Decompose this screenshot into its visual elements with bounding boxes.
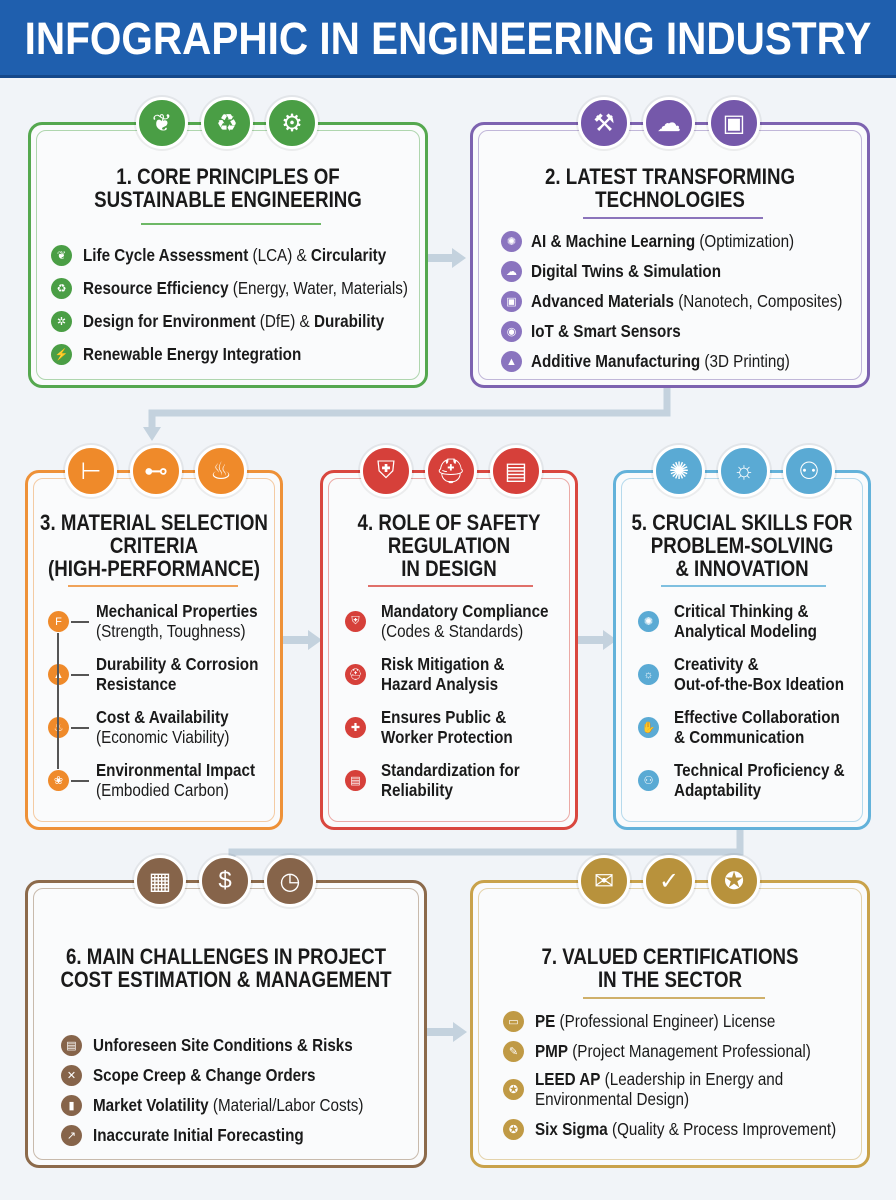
- list 7: Environmental Design): [535, 1089, 689, 1109]
- icon: gear: [266, 97, 318, 149]
- list 7: LEED AP (Leadership in Energy and: [535, 1069, 783, 1089]
- list 4: Risk Mitigation &: [381, 654, 504, 674]
- list 1: Design for Environment (DfE) & Durability: [83, 311, 384, 331]
- icon: leaf: ❦: [152, 110, 172, 136]
- icon: clock: [264, 855, 316, 907]
- icon: shield: [360, 445, 412, 497]
- list 6: Market Volatility (Material/Labor Costs): [93, 1095, 363, 1115]
- list 5: ✋: [642, 722, 655, 734]
- list 1: ⚡: [55, 349, 68, 361]
- connector: panel 2 to panel 3: [143, 388, 670, 441]
- list 3: (Economic Viability): [96, 727, 229, 747]
- heading 7: [542, 944, 798, 992]
- list 3: Mechanical Properties: [96, 601, 258, 621]
- heading 6: [60, 944, 392, 992]
- icon: money bag: [199, 855, 251, 907]
- icon: caliper: [65, 445, 117, 497]
- list 2: ▣: [506, 296, 517, 308]
- icon: caliper: ⊢: [81, 458, 101, 484]
- arrow: panel 6 to panel 7: [427, 1022, 467, 1042]
- icon: robot arm: ⚒: [593, 110, 615, 136]
- list 6: ↗: [67, 1130, 76, 1142]
- list 7: [503, 1011, 836, 1140]
- icon: light bulb: ☼: [733, 457, 755, 484]
- list 1: Life Cycle Assessment (LCA) & Circularity: [83, 245, 386, 265]
- icon: cloud: [643, 97, 695, 149]
- list 5: Technical Proficiency &: [674, 760, 845, 780]
- list 3: (Strength, Toughness): [96, 621, 246, 641]
- panel 2: technologies: [470, 122, 870, 388]
- icon: hard hat: ⛑: [436, 458, 466, 484]
- heading 1: [94, 164, 362, 212]
- list 3: ♨: [54, 722, 63, 734]
- list 7: ✎: [509, 1046, 518, 1058]
- list 2: ✺: [507, 236, 516, 248]
- list 2: ▲: [506, 356, 517, 368]
- panel 3: material selection: [25, 470, 283, 830]
- list 3: Resistance: [96, 674, 176, 694]
- list 5: Effective Collaboration: [674, 707, 840, 727]
- list 3: (Embodied Carbon): [96, 780, 229, 800]
- list 5: Out-of-the-Box Ideation: [674, 674, 844, 694]
- icon: award check: ✓: [659, 868, 679, 894]
- heading 3: 3. MATERIAL SELECTION: [40, 510, 268, 535]
- list 7: PE (Professional Engineer) License: [535, 1011, 775, 1031]
- icon: award check: [643, 855, 695, 907]
- list 2: Additive Manufacturing (3D Printing): [531, 351, 790, 371]
- icon: dumbbell: ⊷: [144, 458, 168, 484]
- icon: dumbbell: [130, 445, 182, 497]
- list 2: AI & Machine Learning (Optimization): [531, 231, 794, 251]
- icon: flame: [195, 445, 247, 497]
- list 7: Six Sigma (Quality & Process Improvement): [535, 1119, 836, 1139]
- list 4: Mandatory Compliance: [381, 601, 549, 621]
- list 2: Advanced Materials (Nanotech, Composites): [531, 291, 842, 311]
- icon: gear: ⚙: [281, 110, 303, 136]
- heading 5: PROBLEM-SOLVING: [651, 533, 833, 558]
- icon: chip: ▣: [723, 110, 745, 136]
- list 5: Creativity &: [674, 654, 759, 674]
- list 1: ❦: [57, 250, 66, 262]
- list 2: [501, 231, 842, 372]
- list 7: PMP (Project Management Professional): [535, 1041, 811, 1061]
- icon: light bulb: [718, 445, 770, 497]
- heading 3: (HIGH-PERFORMANCE): [48, 556, 260, 581]
- list 6: Scope Creep & Change Orders: [93, 1065, 316, 1085]
- list 4: ⛨: [351, 615, 360, 627]
- list 1: ✲: [57, 316, 66, 328]
- list 7: ✪: [509, 1084, 518, 1096]
- panel 7: certifications: [470, 880, 870, 1168]
- heading 4: [358, 510, 540, 581]
- icon: leaf: [136, 97, 188, 149]
- heading 7: 7. VALUED CERTIFICATIONS: [542, 944, 798, 969]
- icon: shield: ⛨: [377, 457, 395, 484]
- icon: brain: [653, 445, 705, 497]
- list 1: [51, 245, 408, 365]
- icon: manual: [490, 445, 542, 497]
- list 5: ☼: [643, 668, 654, 680]
- list 3: ▲: [53, 668, 64, 680]
- list 2: Digital Twins & Simulation: [531, 261, 721, 281]
- list 6: Unforeseen Site Conditions & Risks: [93, 1035, 353, 1055]
- list 1: Renewable Energy Integration: [83, 344, 301, 364]
- icon: rosette: ✪: [724, 868, 744, 894]
- list 6: Inaccurate Initial Forecasting: [93, 1125, 304, 1145]
- heading 6: 6. MAIN CHALLENGES IN PROJECT: [66, 944, 386, 969]
- icon: recycle: ♻: [216, 110, 238, 136]
- heading 1: 1. CORE PRINCIPLES OF: [116, 164, 340, 189]
- panel 1: sustainable engineering: [28, 122, 428, 388]
- list 5: Analytical Modeling: [674, 621, 817, 641]
- list 6: ✕: [67, 1070, 76, 1082]
- list 4: ⛑: [349, 669, 362, 681]
- heading 3: CRITERIA: [110, 533, 198, 558]
- list 5: ✺: [644, 616, 653, 628]
- list 7: ▭: [508, 1016, 519, 1028]
- icon: calculator: [134, 855, 186, 907]
- title banner: INFOGRAPHIC IN ENGINEERING INDUSTRY: [25, 13, 871, 64]
- icon: money bag: $: [218, 867, 232, 894]
- icon: calculator: ▦: [149, 868, 171, 894]
- list 4: Reliability: [381, 780, 453, 800]
- list 4: Hazard Analysis: [381, 674, 498, 694]
- list 3: Durability & Corrosion: [96, 654, 258, 674]
- arrow: panel 3 to panel 4: [283, 630, 320, 650]
- list 4: (Codes & Standards): [381, 621, 523, 641]
- icon: rosette: [708, 855, 760, 907]
- heading 4: IN DESIGN: [401, 556, 497, 581]
- list 5: [638, 601, 845, 800]
- list 2: ☁: [506, 266, 517, 278]
- title banner: [0, 0, 896, 78]
- panel 4: safety regulation: [320, 470, 578, 830]
- list 7: ✪: [509, 1124, 518, 1136]
- list 5: ⚇: [644, 775, 653, 787]
- icon: diploma: ✉: [594, 868, 614, 894]
- list 6: ▤: [66, 1040, 77, 1052]
- heading 2: TECHNOLOGIES: [595, 187, 745, 212]
- list 4: [345, 601, 549, 800]
- heading 7: IN THE SECTOR: [598, 967, 742, 992]
- heading 3: [40, 510, 268, 581]
- heading 5: 5. CRUCIAL SKILLS FOR: [632, 510, 852, 535]
- icon: robot arm: [578, 97, 630, 149]
- list 3: [48, 601, 258, 800]
- heading 2: 2. LATEST TRANSFORMING: [545, 164, 795, 189]
- list 4: Worker Protection: [381, 727, 513, 747]
- icon: chip: [708, 97, 760, 149]
- list 3: F: [55, 616, 62, 628]
- list 2: ◉: [507, 326, 516, 338]
- icon: people: [783, 445, 835, 497]
- list 1: Resource Efficiency (Energy, Water, Materials): [83, 278, 408, 298]
- icon: recycle: [201, 97, 253, 149]
- icon: manual: ▤: [505, 458, 527, 484]
- heading 5: & INNOVATION: [675, 556, 809, 581]
- list 4: ▤: [350, 775, 361, 787]
- arrow: panel 4 to panel 5: [578, 630, 613, 650]
- list 4: Standardization for: [381, 760, 520, 780]
- list 4: Ensures Public &: [381, 707, 506, 727]
- list 3: Cost & Availability: [96, 707, 229, 727]
- list 3: ❀: [54, 775, 63, 787]
- list 6: [61, 1035, 363, 1146]
- icon: hard hat: [425, 445, 477, 497]
- icon: cloud: ☁: [657, 110, 681, 136]
- panel 6: cost estimation challenges: [25, 880, 427, 1168]
- icon: diploma: [578, 855, 630, 907]
- list 6: ▮: [68, 1100, 75, 1112]
- icon: brain: ✺: [669, 458, 689, 484]
- heading 1: SUSTAINABLE ENGINEERING: [94, 187, 362, 212]
- list 5: Adaptability: [674, 780, 761, 800]
- list 5: Critical Thinking &: [674, 601, 809, 621]
- icon: clock: ◷: [280, 868, 300, 894]
- list 2: IoT & Smart Sensors: [531, 321, 681, 341]
- panel 5: skills: [613, 470, 871, 830]
- list 1: ♻: [57, 283, 66, 295]
- heading 5: [632, 510, 852, 581]
- list 4: ✚: [351, 722, 360, 734]
- connector: panel 5 to panel 6: [228, 830, 744, 857]
- heading 4: REGULATION: [388, 533, 510, 558]
- list 5: & Communication: [674, 727, 804, 747]
- icon: people: ⚇: [798, 458, 820, 484]
- list 3: Environmental Impact: [96, 760, 255, 780]
- icon: flame: ♨: [210, 458, 232, 484]
- heading 6: COST ESTIMATION & MANAGEMENT: [60, 967, 392, 992]
- arrow: panel 1 to panel 2: [428, 248, 466, 268]
- heading 4: 4. ROLE OF SAFETY: [358, 510, 540, 535]
- heading 2: [545, 164, 795, 212]
